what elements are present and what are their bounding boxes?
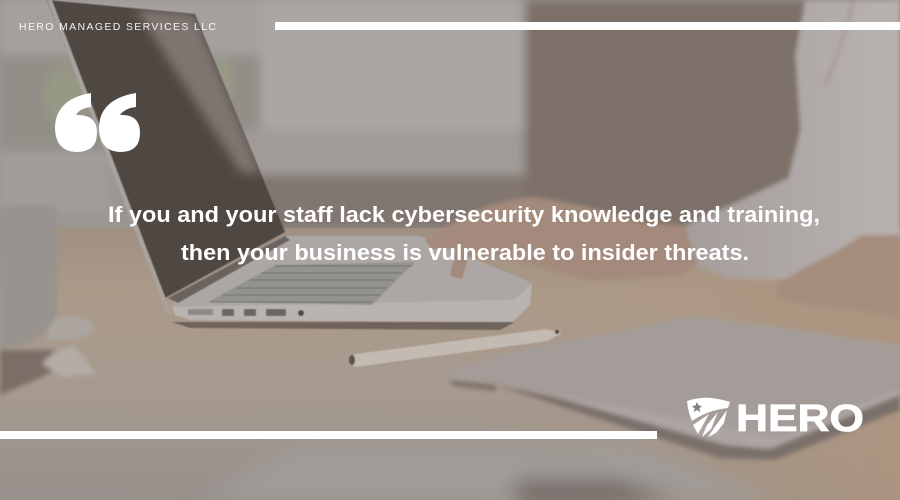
laptop base [168, 236, 532, 330]
laptop screen [47, 0, 285, 315]
header label: HERO MANAGED SERVICES LLC [19, 21, 216, 33]
top rule [275, 22, 900, 30]
logo: HERO [687, 398, 864, 440]
quote text: If you and your staff lack cybersecurity knowledge and training, [108, 202, 820, 227]
wordmark: HERO [736, 398, 864, 440]
wall and window [0, 0, 900, 235]
lower foreground blur [200, 445, 780, 500]
coffee cup [0, 206, 96, 395]
hand on desk [776, 235, 900, 318]
fingers over trackpad [425, 213, 505, 279]
quote text [108, 202, 820, 265]
desk surface [0, 228, 900, 500]
notebook [446, 316, 900, 460]
icon: quotation mark [55, 93, 140, 152]
bottom rule [0, 431, 657, 439]
hand on trackpad [430, 197, 697, 281]
icon: shield with star [687, 398, 730, 437]
quote text: then your business is vulnerable to insider threats. [181, 240, 749, 265]
shirt [683, 0, 900, 280]
pen [349, 329, 562, 367]
